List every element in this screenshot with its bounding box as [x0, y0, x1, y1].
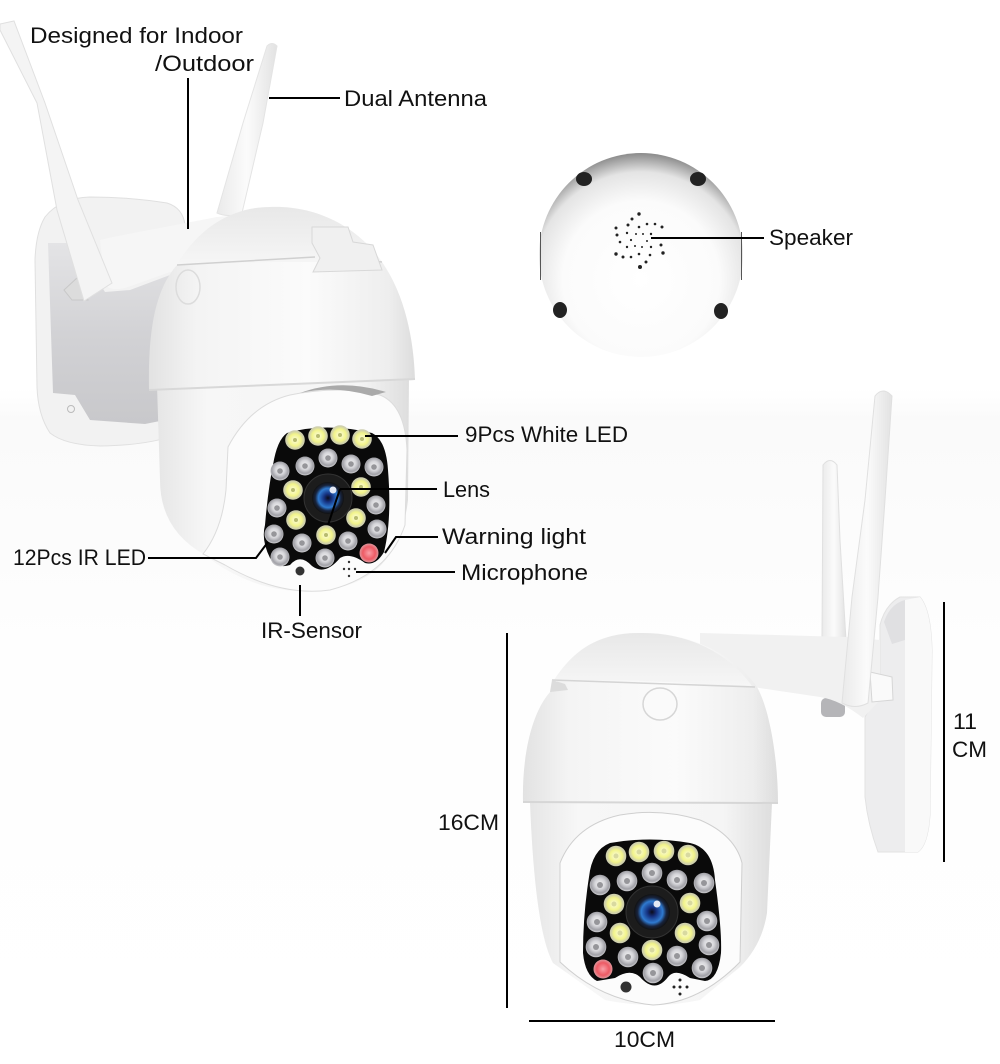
label: designed for indoor outdoor [30, 23, 254, 76]
antenna knob [64, 277, 88, 300]
ir leds [264, 448, 386, 568]
lens [304, 474, 352, 522]
lower housing [530, 803, 772, 1005]
lower housing [157, 378, 409, 591]
dimension: mount height: CM [952, 737, 987, 762]
dimension lines [507, 602, 944, 1021]
face shroud [203, 390, 407, 591]
dimension: width: 10CM [614, 1027, 675, 1052]
ir sensor [620, 982, 632, 992]
ir leds [586, 863, 719, 983]
label: speaker: Speaker [769, 225, 853, 250]
leader lines [148, 78, 764, 616]
mount arm [700, 633, 880, 718]
front antenna [842, 391, 892, 706]
microphone holes [343, 561, 356, 577]
label: ir led: 12Pcs IR LED [13, 545, 146, 570]
hinge [870, 672, 893, 702]
label: warning light: Warning light [442, 524, 586, 549]
mount recess [48, 243, 170, 424]
ir sensor [296, 566, 304, 576]
label: designed for indoor outdoor: /Outdoor [155, 51, 254, 76]
face shroud [560, 812, 742, 1005]
label: designed for indoor outdoor: Designed for Indoor [30, 23, 243, 48]
back antenna [822, 460, 846, 640]
label: lens: Lens [443, 477, 490, 502]
warning light [360, 544, 378, 562]
camera: front view with wall mount [0, 21, 415, 591]
lens [626, 886, 678, 938]
speaker disc [539, 153, 743, 357]
dimension: mount height: 11 [953, 709, 977, 734]
screws [553, 172, 728, 319]
dimension: mount height [952, 709, 987, 762]
mount plate [865, 597, 932, 852]
white leds [283, 425, 372, 545]
warning light [594, 960, 612, 978]
dome cap [149, 207, 415, 390]
wall mount plate [35, 197, 185, 446]
speaker underside view [539, 153, 743, 357]
left antenna [0, 21, 112, 301]
microphone holes [672, 978, 688, 996]
led panel [583, 840, 721, 986]
label: dual antenna: Dual Antenna [344, 86, 488, 111]
label: microphone: Microphone [461, 560, 588, 585]
right antenna [217, 44, 277, 216]
label: white led: 9Pcs White LED [465, 422, 628, 447]
dimension: height: 16CM [438, 810, 499, 835]
dome cap [523, 633, 778, 803]
mount bracket [821, 698, 845, 717]
camera: side view with dimensions [523, 391, 932, 1005]
round button [643, 688, 677, 720]
top latch [312, 227, 382, 272]
round button [176, 270, 200, 304]
label: ir sensor: IR-Sensor [261, 618, 362, 643]
mount arm [100, 214, 250, 289]
speaker holes [614, 212, 665, 269]
white leds [604, 841, 700, 960]
led panel [264, 428, 389, 570]
